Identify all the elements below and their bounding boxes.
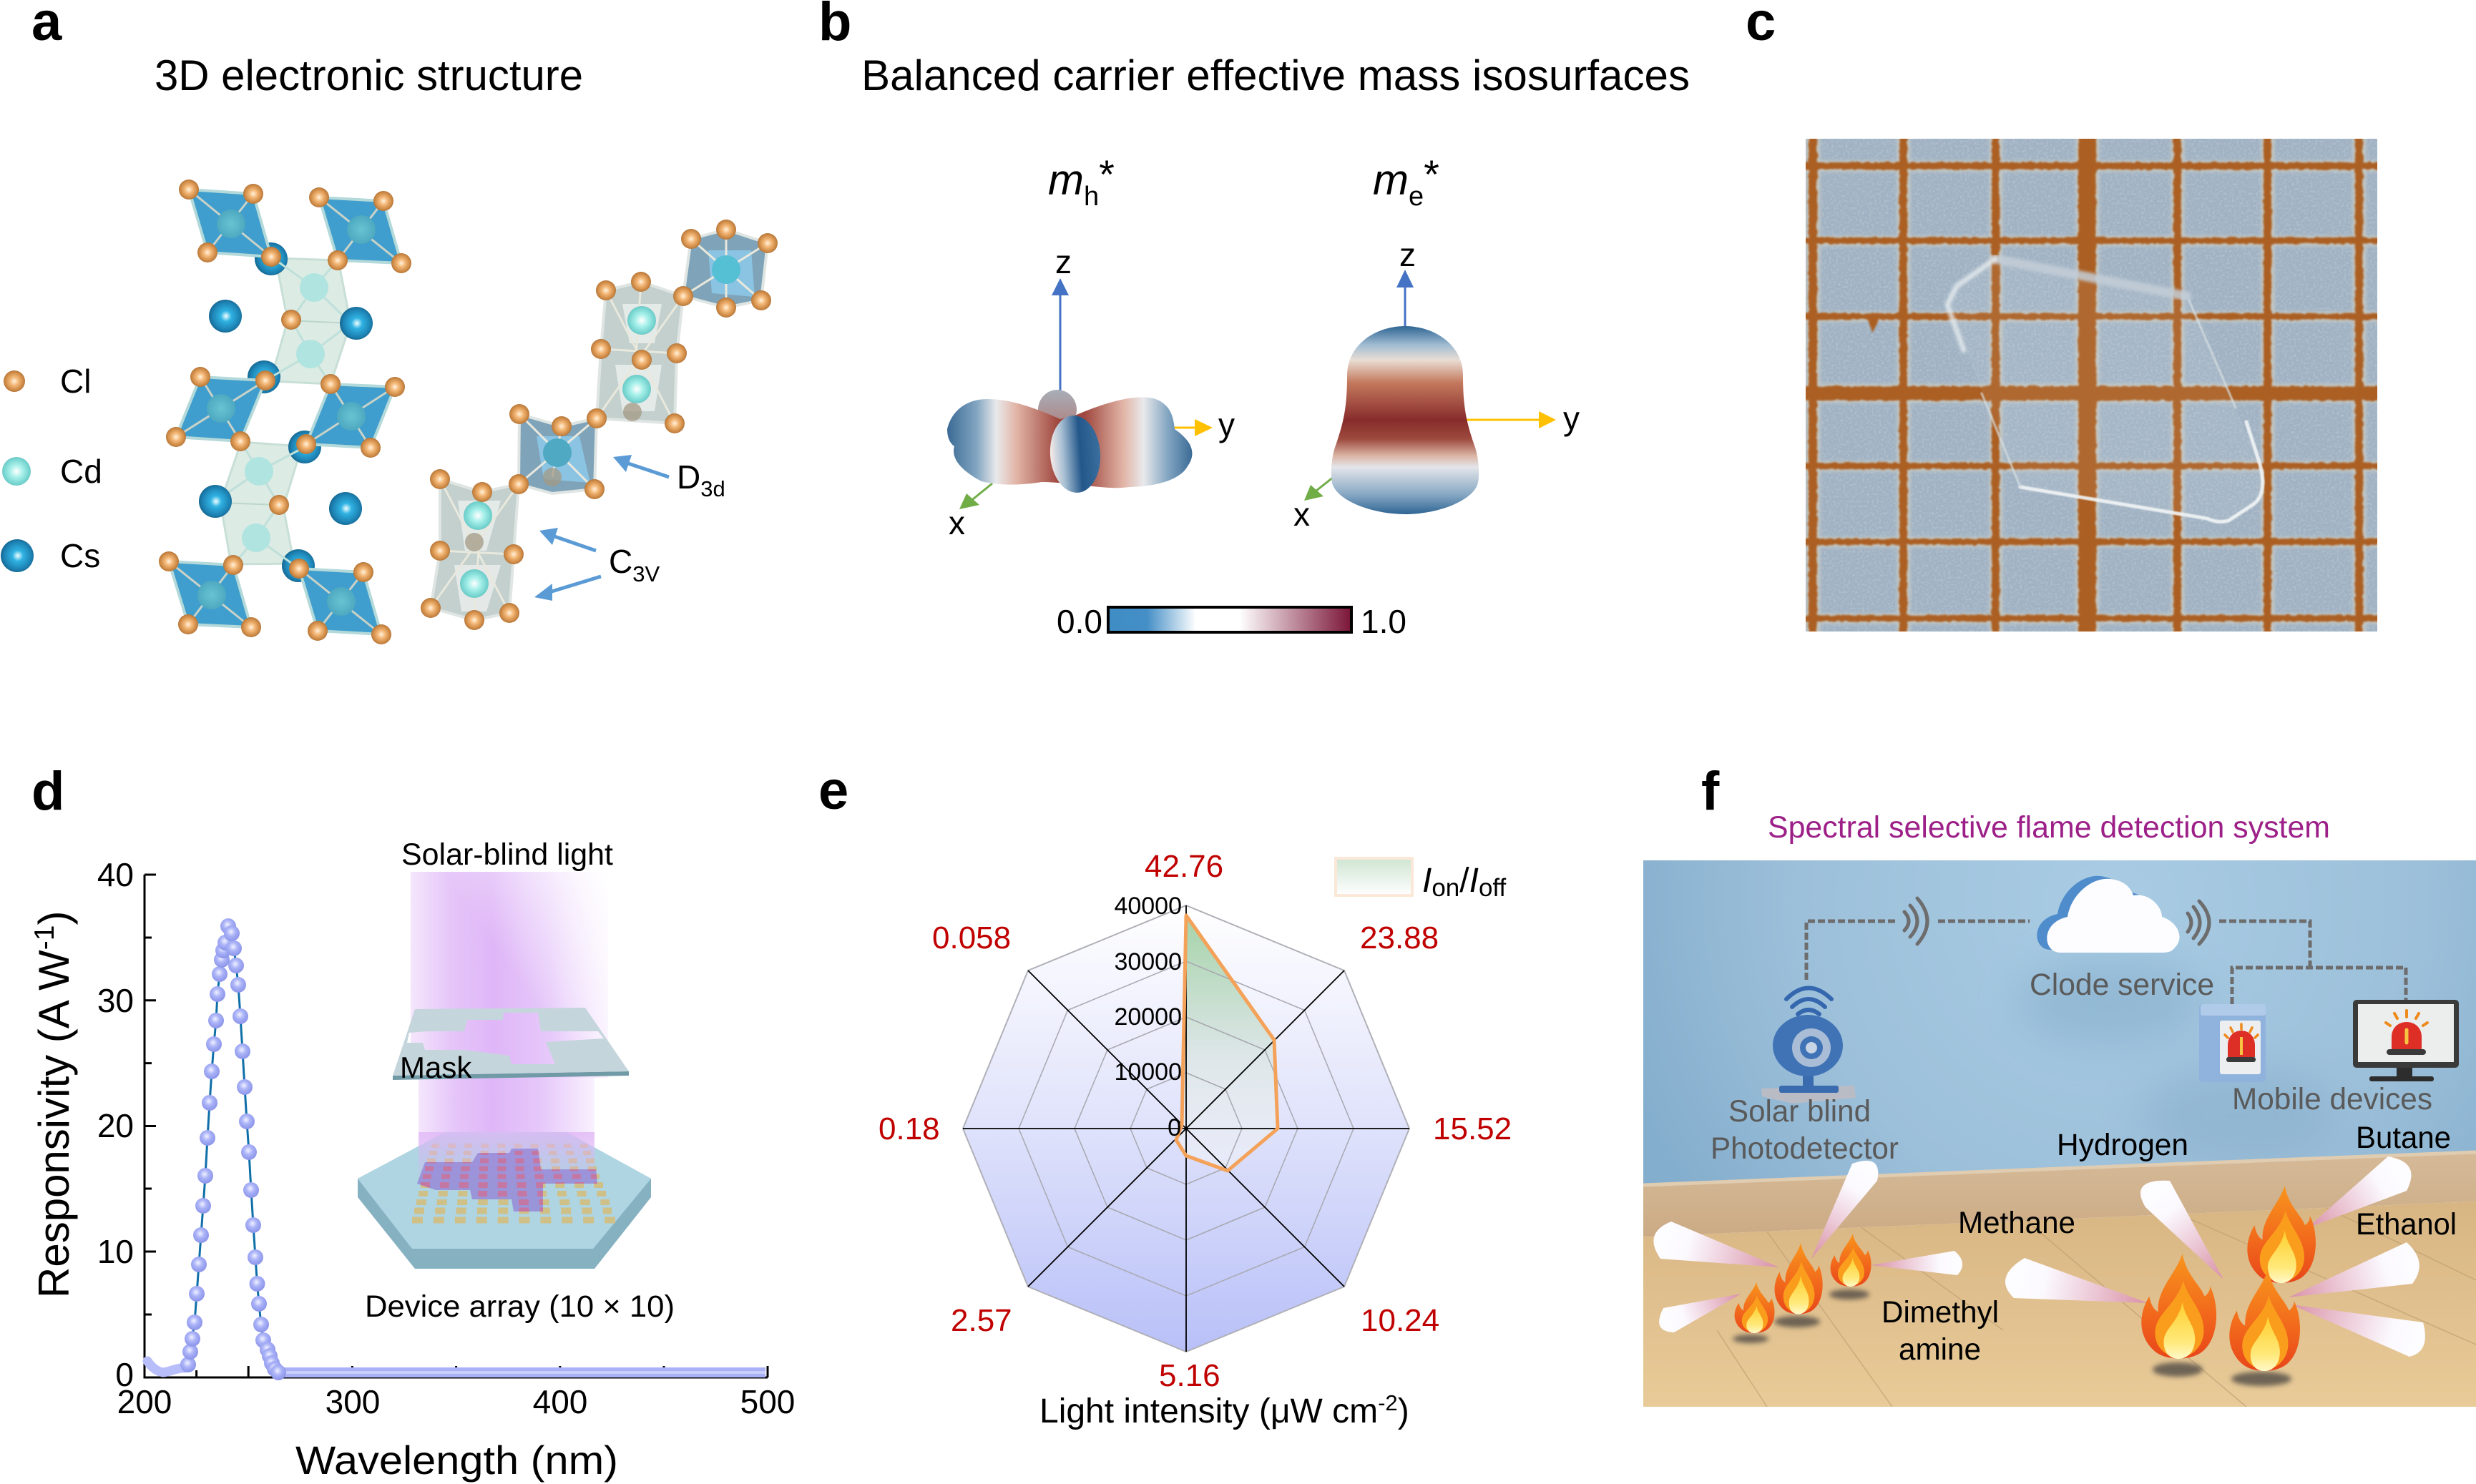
data area — [1176, 915, 1278, 1171]
light intensity labels: 5.16 — [1159, 1358, 1220, 1393]
x tick labels — [117, 1383, 795, 1420]
inset: solar-blind light device schematic — [358, 837, 675, 1324]
radial axis labels: 20000 — [1114, 1003, 1182, 1031]
x tick labels: 200 — [117, 1383, 172, 1420]
panel f: flame detection system — [1643, 761, 2476, 1407]
emission cones — [1653, 1156, 2425, 1357]
colour bar — [1057, 603, 1406, 640]
gas labels: Hydrogen — [2057, 1128, 2188, 1162]
system labels: Solar blind — [1728, 1094, 1871, 1129]
label D3d: D — [677, 458, 700, 496]
radar plot — [879, 849, 1512, 1430]
light intensity labels: 2.57 — [951, 1303, 1012, 1338]
legend Ion/Ioff: I — [1469, 862, 1479, 900]
y axis title: Responsivity (A W — [30, 950, 78, 1298]
y tick labels — [97, 856, 134, 1393]
legend Ion/Ioff: on — [1432, 874, 1459, 902]
axes — [145, 875, 768, 1377]
colour bar: 1.0 — [1361, 603, 1406, 640]
electron effective mass label: * — [1424, 152, 1439, 197]
electron effective mass label: e — [1409, 182, 1424, 212]
panel label d: d — [31, 761, 64, 822]
light intensity labels — [879, 849, 1512, 1393]
y axis title: ) — [30, 911, 78, 925]
panel a title: 3D electronic structure — [155, 51, 583, 99]
y tick labels: 40 — [97, 856, 134, 893]
y tick labels: 0 — [115, 1356, 134, 1393]
arrow: C3v lower — [534, 576, 601, 601]
data series — [147, 918, 765, 1380]
skirting board — [1643, 1152, 2476, 1237]
hole isosurface with axes: x — [949, 504, 965, 541]
light intensity labels: 0.18 — [879, 1111, 940, 1146]
left crystal structure — [159, 180, 411, 644]
light intensity labels: 42.76 — [1145, 849, 1223, 884]
connection lines — [1806, 921, 2406, 1004]
gas labels — [1882, 1121, 2457, 1367]
light beam lower — [419, 1078, 594, 1149]
photo of crystal on graph paper — [1796, 129, 2389, 644]
panel label e: e — [818, 760, 848, 821]
hole effective mass label: * — [1099, 152, 1115, 197]
legend: atom species: Cl — [60, 363, 91, 400]
gas labels: Ethanol — [2356, 1207, 2457, 1242]
light intensity labels: 23.88 — [1360, 920, 1439, 955]
x axis title: Wavelength (nm) — [295, 1438, 618, 1483]
legend: atom species — [1, 363, 102, 574]
colour bar: 0.0 — [1057, 603, 1102, 640]
x tick labels: 400 — [533, 1383, 587, 1420]
light beam upper — [411, 872, 608, 1078]
radial axis labels: 30000 — [1114, 948, 1182, 976]
radar background — [963, 905, 1409, 1352]
electron effective mass label: m — [1373, 156, 1409, 204]
panel b: effective mass isosurfaces — [818, 0, 1690, 640]
mask: Mask — [400, 1051, 472, 1084]
label C3V: C — [609, 543, 632, 580]
device array substrate — [358, 1132, 651, 1269]
hole effective mass label: h — [1084, 182, 1099, 212]
electron isosurface with axes: x — [1293, 496, 1310, 533]
electron isosurface with axes — [1293, 236, 1580, 533]
panel e: radar chart — [818, 760, 1512, 1430]
floor — [1643, 1202, 2476, 1407]
y tick labels: 10 — [97, 1233, 134, 1270]
legend Ion/Ioff: / — [1459, 862, 1469, 900]
gas labels: Methane — [1958, 1206, 2075, 1240]
line chart: responsivity vs wavelength — [29, 856, 795, 1483]
label C3V: 3V — [632, 561, 660, 586]
panel b title: Balanced carrier effective mass isosurfaces — [861, 51, 1690, 99]
hole isosurface with axes: z — [1055, 243, 1072, 280]
label D3d: 3d — [700, 476, 725, 501]
x tick labels: 300 — [326, 1383, 380, 1420]
gas labels: Dimethyl — [1882, 1295, 1999, 1330]
inset labels: Solar-blind light — [401, 837, 613, 872]
panel c: crystal photograph — [1746, 0, 2389, 644]
cloud — [2037, 876, 2180, 953]
y tick labels: 20 — [97, 1107, 134, 1144]
panel a: 3D electronic structure — [1, 0, 778, 644]
scene illustration — [1643, 860, 2476, 1407]
monitor icon — [2353, 1000, 2459, 1081]
y axis title: -1 — [29, 925, 60, 950]
radial axis labels: 40000 — [1114, 893, 1182, 920]
light intensity labels: 0.058 — [932, 920, 1011, 955]
radial axis labels — [1114, 893, 1182, 1141]
legend: atom species: Cd — [60, 453, 102, 490]
legend Ion/Ioff: I — [1422, 862, 1432, 900]
panel d: responsivity chart — [29, 761, 795, 1483]
x tick labels: 500 — [740, 1383, 795, 1420]
transparent crystal — [1947, 259, 2263, 521]
axis title: ) — [1398, 1392, 1409, 1430]
wireless signal left — [1904, 898, 1927, 944]
hole isosurface with axes: y — [1218, 406, 1235, 443]
data outline — [1176, 915, 1278, 1171]
mask — [393, 1008, 629, 1084]
gas labels: Butane — [2356, 1121, 2451, 1155]
panel f title: Spectral selective flame detection system — [1768, 810, 2330, 845]
radial axis labels: 0 — [1168, 1114, 1181, 1141]
alarm box icon — [2199, 1004, 2266, 1082]
system labels: Mobile devices — [2232, 1082, 2432, 1116]
axis title: Light intensity (μW cm — [1039, 1392, 1378, 1430]
photodetector icon — [1761, 988, 1856, 1104]
electron isosurface with axes: z — [1399, 236, 1416, 273]
radial axis labels: 10000 — [1114, 1058, 1182, 1086]
light intensity labels: 10.24 — [1361, 1303, 1439, 1338]
inset labels — [365, 837, 675, 1324]
legend Ion/Ioff — [1336, 858, 1507, 902]
y tick labels: 30 — [97, 982, 134, 1019]
gas labels: amine — [1899, 1332, 1981, 1367]
arrow: C3v upper — [539, 528, 596, 551]
hole effective mass label: m — [1048, 156, 1084, 204]
flames — [1735, 1186, 2316, 1371]
electron isosurface with axes: y — [1563, 400, 1580, 437]
system labels: Clode service — [2030, 968, 2214, 1002]
legend Ion/Ioff: off — [1479, 874, 1507, 902]
panel label f: f — [1701, 761, 1720, 822]
axis title: -2 — [1378, 1390, 1398, 1415]
flame shadows — [1733, 1289, 2291, 1386]
legend: atom species: Cs — [60, 537, 100, 574]
right crystal structure — [421, 220, 778, 630]
light intensity labels: 15.52 — [1433, 1111, 1512, 1146]
system labels — [1711, 968, 2432, 1166]
hole isosurface with axes — [947, 243, 1235, 541]
inset labels: Device array (10 × 10) — [365, 1289, 675, 1324]
arrow: D3d — [613, 455, 669, 477]
wireless signal right — [2188, 901, 2209, 944]
system labels: Photodetector — [1711, 1131, 1899, 1166]
wall — [1643, 860, 2476, 1185]
